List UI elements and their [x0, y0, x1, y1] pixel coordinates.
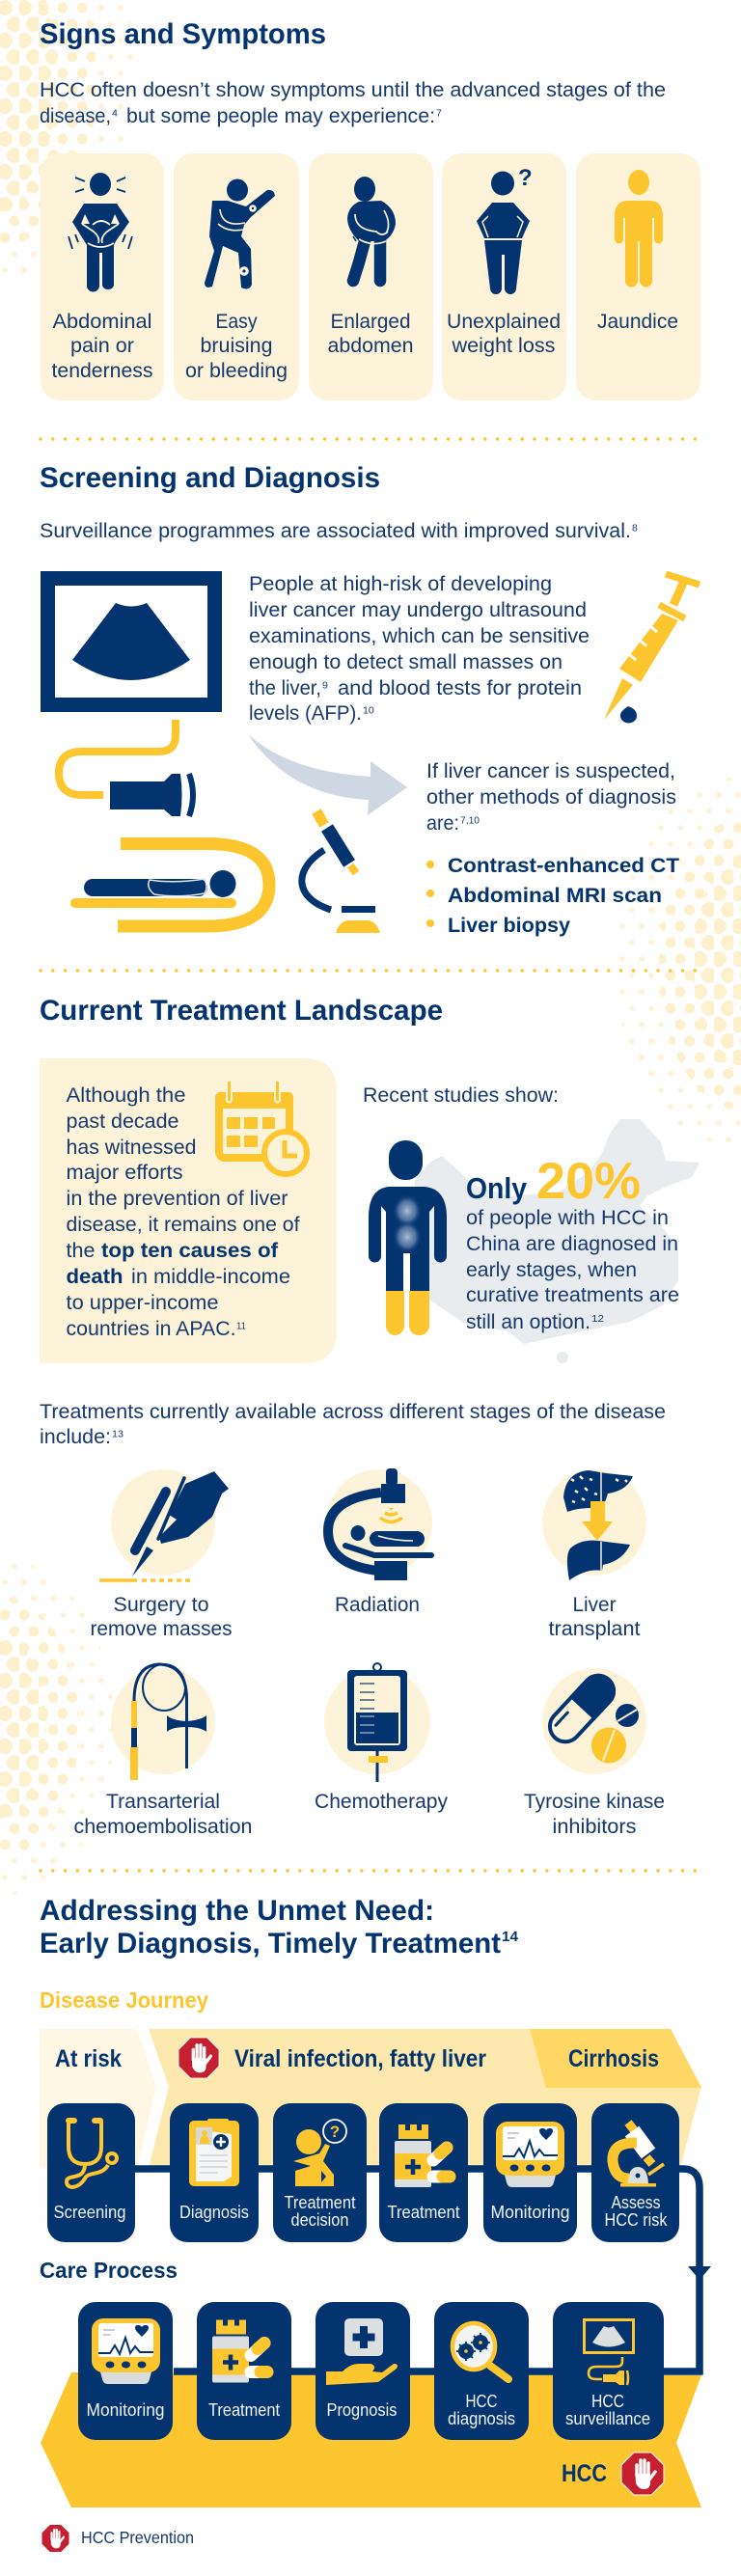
- treatment: chemotherapy: [315, 1663, 448, 1813]
- text: stat description: China are diagnosed in: [466, 1232, 678, 1255]
- icon: microscope: [302, 811, 380, 933]
- icon: thinking person: ?: [330, 2123, 340, 2141]
- step: HCC surveillance: [553, 2302, 664, 2440]
- heading: addressing the unmet need: 14: [502, 1929, 519, 1945]
- section: signs and symptoms: [40, 18, 700, 400]
- subheading: care process: Care Process: [40, 2258, 178, 2283]
- stage: at risk: [40, 2029, 156, 2168]
- label: transarterial chemoembolisation: chemoembolisation: [73, 1815, 253, 1838]
- label: assess HCC risk: Assess: [612, 2192, 660, 2212]
- step: screening: [47, 2103, 135, 2242]
- card: unexplained weight loss: [442, 153, 566, 400]
- step: treatment: [197, 2302, 291, 2440]
- label: HCC surveillance: surveillance: [565, 2408, 650, 2428]
- label: assess HCC risk: HCC risk: [604, 2209, 668, 2230]
- treatment: transarterial chemoembolisation: [73, 1664, 253, 1838]
- text: treatments intro: include:: [40, 1425, 111, 1448]
- icon: medicine bottle: [395, 2124, 450, 2187]
- step: diagnosis: [170, 2103, 259, 2242]
- heading: signs and symptoms: Signs and Symptoms: [40, 18, 326, 50]
- text: ultrasound explanation: and blood tests for protein: [338, 676, 582, 699]
- label: unexplained weight loss: [447, 310, 561, 357]
- text: stat description: still an option.: [466, 1310, 590, 1333]
- text: prevention paragraph: top ten causes of: [101, 1239, 279, 1262]
- label: easy bruising: bruising: [201, 334, 272, 357]
- heading: addressing the unmet need: [40, 1895, 519, 1959]
- intro text: HCC often doesn’t show symptoms until the advanced stages of the: [40, 78, 666, 101]
- text: treatments intro: 13: [112, 1428, 124, 1439]
- connector: care process line with arrow: [135, 2169, 711, 2371]
- label: HCC diagnosis: [448, 2391, 515, 2428]
- banner: disease journey: [40, 2029, 701, 2168]
- section: addressing the unmet need: [40, 1895, 711, 2552]
- section: current treatment landscape: [40, 995, 700, 1838]
- legend: HCC prevention: HCC Prevention: [81, 2528, 194, 2547]
- icon: heart monitor: [496, 2122, 564, 2187]
- label: abdominal pain: tenderness: [52, 359, 152, 382]
- intro text: disease,: [40, 104, 111, 127]
- text: prevention paragraph: has witnessed: [66, 1136, 197, 1159]
- icon: jaundice figure: [615, 170, 663, 288]
- label: unexplained weight loss: Unexplained: [447, 310, 561, 333]
- icon: hand holding cross: [326, 2318, 398, 2385]
- step: assess HCC risk: [591, 2103, 679, 2242]
- stat: only 20%: Only: [466, 1171, 528, 1205]
- label: easy bruising: [185, 310, 288, 382]
- label: tyrosine kinase inhibitors: inhibitors: [552, 1815, 637, 1838]
- text: ultrasound explanation: People at high-risk of developing: [249, 572, 552, 595]
- step: monitoring: [483, 2103, 577, 2242]
- big arrow: HCC: HCC: [562, 2460, 607, 2487]
- icon: person with liver highlight: [369, 1140, 447, 1335]
- step: monitoring: [78, 2302, 173, 2440]
- list: diagnosis methods: [426, 854, 679, 937]
- label: treatment decision: decision: [291, 2209, 349, 2230]
- label: assess HCC risk: [604, 2192, 668, 2230]
- text: prevention paragraph: the: [66, 1239, 95, 1262]
- text: prevention paragraph: 11: [236, 1320, 246, 1331]
- label: radiation: Radiation: [335, 1593, 420, 1616]
- text: recent studies: Recent studies show:: [363, 1083, 559, 1107]
- icon: weight loss figure: ?: [518, 165, 533, 191]
- label: liver transplant: transplant: [548, 1617, 641, 1640]
- card: enlarged abdomen: [309, 153, 433, 400]
- intro text: [40, 78, 666, 127]
- step: treatment: [379, 2103, 468, 2242]
- text: stat description: 12: [591, 1313, 604, 1325]
- label: surgery: remove masses: [91, 1617, 232, 1640]
- text: ultrasound explanation: the liver,: [249, 676, 321, 699]
- icon: bruising figure: [205, 179, 275, 288]
- list: diagnosis methods: Contrast-enhanced CT: [448, 854, 679, 877]
- label: enlarged abdomen: abdomen: [328, 334, 413, 357]
- treatment: radiation: [326, 1468, 432, 1616]
- icon: ultrasound: [585, 2319, 633, 2385]
- text: ultrasound explanation: [249, 572, 590, 725]
- stage: at risk: At risk: [55, 2045, 122, 2072]
- arrow: to further diagnosis: [248, 734, 407, 815]
- icon: clipboard: [189, 2119, 239, 2186]
- stage: cirrhosis: [530, 2029, 701, 2088]
- text: ultrasound explanation: examinations, which can be sensitive: [249, 624, 590, 647]
- text: ultrasound explanation: enough to detect small masses on: [249, 650, 563, 673]
- label: screening: Screening: [54, 2202, 125, 2222]
- label: diagnosis: Diagnosis: [179, 2202, 249, 2222]
- label: enlarged abdomen: [328, 310, 413, 357]
- text: prevention paragraph: countries in APAC.: [66, 1317, 235, 1340]
- text: other diagnosis methods: If liver cancer is suspected,: [426, 759, 675, 782]
- text: prevention paragraph: past decade: [66, 1110, 179, 1133]
- heading: addressing the unmet need: Early Diagnosis, Timely Treatment: [40, 1928, 501, 1959]
- stage: cirrhosis: Cirrhosis: [568, 2045, 659, 2072]
- treatment: liver transplant: [542, 1468, 646, 1640]
- icon: enlarged abdomen figure: [347, 177, 396, 281]
- label: unexplained weight loss: weight loss: [451, 334, 556, 357]
- map: China: [415, 1119, 700, 1363]
- list: diagnosis methods: Liver biopsy: [448, 914, 570, 937]
- text: stat description: curative treatments are: [466, 1283, 679, 1306]
- step: treatment decision: [273, 2103, 367, 2242]
- label: liver transplant: Liver: [573, 1593, 616, 1616]
- text: other diagnosis methods: are:: [426, 811, 459, 835]
- label: abdominal pain: pain or: [70, 334, 134, 357]
- label: prognosis: Prognosis: [326, 2399, 398, 2420]
- intro text: but some people may experience:: [126, 104, 435, 127]
- label: treatment decision: [284, 2192, 355, 2230]
- treatment: surgery: [91, 1469, 232, 1640]
- big arrow: HCC: [41, 2372, 701, 2507]
- intro text: 7: [436, 108, 442, 120]
- stat: only 20%: [466, 1153, 641, 1210]
- stat: only 20%: 20%: [536, 1153, 641, 1210]
- label: jaundice: Jaundice: [597, 310, 678, 333]
- text: prevention paragraph: to upper-income: [66, 1291, 218, 1314]
- text: stat description: [466, 1206, 679, 1333]
- text: stat description: of people with HCC in: [466, 1206, 669, 1229]
- text: prevention paragraph: death: [66, 1265, 124, 1288]
- label: chemotherapy: Chemotherapy: [315, 1790, 448, 1813]
- icon: calendar with clock: [215, 1082, 307, 1174]
- intro text: 8: [632, 523, 638, 534]
- text: prevention paragraph: disease, it remains one of: [66, 1213, 300, 1236]
- text: ultrasound explanation: liver cancer may undergo ultrasound: [249, 598, 587, 621]
- icon: microscope: [613, 2123, 664, 2186]
- icon: syringe: [604, 574, 700, 723]
- text: treatments intro: [40, 1400, 666, 1448]
- label: HCC surveillance: HCC: [591, 2391, 624, 2411]
- stage: viral infection, fatty liver: [149, 2029, 701, 2168]
- label: easy bruising: Easy: [216, 310, 258, 333]
- panel: prevention callout: [40, 1058, 337, 1363]
- heading: screening and diagnosis: Screening and Diagnosis: [40, 462, 380, 494]
- label: transarterial chemoembolisation: Transarterial: [106, 1790, 220, 1813]
- label: treatment: Treatment: [388, 2202, 459, 2222]
- icon: thinking person: [293, 2120, 346, 2186]
- text: other diagnosis methods: 7,10: [460, 814, 480, 826]
- label: monitoring: Monitoring: [490, 2202, 569, 2222]
- card: easy bruising: [174, 153, 299, 400]
- subheading: disease journey: Disease Journey: [40, 1987, 208, 2013]
- text: prevention paragraph: in middle-income: [131, 1265, 290, 1288]
- legend: HCC prevention: [41, 2525, 194, 2552]
- label: surgery: [91, 1593, 232, 1640]
- label: abdominal pain: [52, 310, 152, 382]
- heading: addressing the unmet need: Addressing the Unmet Need:: [40, 1895, 434, 1927]
- card: jaundice: [576, 153, 700, 400]
- text: prevention paragraph: major efforts: [66, 1161, 183, 1184]
- icon: magnifier with germs: [453, 2323, 508, 2379]
- label: liver transplant: [548, 1593, 641, 1640]
- icon: ultrasound monitor: [41, 571, 222, 712]
- treatment: tyrosine kinase inhibitors: [524, 1666, 665, 1838]
- label: HCC diagnosis: diagnosis: [448, 2408, 515, 2428]
- icon: weight loss figure: [477, 165, 533, 294]
- label: abdominal pain: Abdominal: [52, 310, 152, 333]
- text: treatments intro: Treatments currently available across different stages of the disease: [40, 1400, 666, 1423]
- label: tyrosine kinase inhibitors: Tyrosine kinase: [524, 1790, 665, 1813]
- label: HCC surveillance: [565, 2391, 650, 2428]
- text: prevention paragraph: in the prevention of liver: [66, 1187, 288, 1210]
- text: ultrasound explanation: levels (AFP).: [249, 701, 362, 725]
- label: HCC diagnosis: HCC: [465, 2391, 498, 2411]
- heading: current treatment landscape: Current Treatment Landscape: [40, 995, 443, 1027]
- text: prevention paragraph: [66, 1083, 300, 1340]
- icon: abdominal pain figure: [69, 173, 132, 291]
- icon: stop hand: [178, 2038, 219, 2078]
- text: prevention paragraph: Although the: [66, 1083, 185, 1107]
- label: monitoring: Monitoring: [87, 2399, 164, 2420]
- label: transarterial chemoembolisation: [73, 1790, 253, 1838]
- section: screening and diagnosis: [40, 462, 700, 937]
- text: stat description: early stages, when: [466, 1258, 637, 1281]
- label: tyrosine kinase inhibitors: [524, 1790, 665, 1838]
- text: other diagnosis methods: other methods of diagnosis: [426, 785, 676, 808]
- label: easy bruising: or bleeding: [185, 359, 288, 382]
- icon: ultrasound probe with cable: [59, 720, 193, 816]
- label: surgery: Surgery to: [114, 1593, 209, 1616]
- list: diagnosis methods: Abdominal MRI scan: [448, 884, 662, 907]
- label: enlarged abdomen: Enlarged: [330, 310, 411, 333]
- icon: MRI scanner with patient: [70, 843, 269, 926]
- intro text: 4: [112, 108, 118, 120]
- icon: heart monitor: [92, 2318, 160, 2384]
- icon: stop hand: [621, 2453, 664, 2495]
- card: abdominal pain: [41, 153, 164, 400]
- text: ultrasound explanation: 9: [322, 679, 328, 691]
- icon: medicine bottle: [212, 2319, 267, 2383]
- intro text: Surveillance programmes are associated with improved survival.: [40, 519, 631, 542]
- label: treatment decision: Treatment: [284, 2192, 355, 2212]
- stage: viral infection, fatty liver: Viral infection, fatty liver: [234, 2045, 486, 2072]
- icon: stop hand: [41, 2525, 69, 2552]
- text: ultrasound explanation: 10: [363, 704, 374, 716]
- icon: stethoscope: [67, 2121, 117, 2187]
- step: HCC diagnosis: [434, 2302, 529, 2440]
- text: other diagnosis methods: [426, 759, 676, 835]
- step: prognosis: [316, 2302, 410, 2440]
- label: treatment: Treatment: [208, 2399, 280, 2420]
